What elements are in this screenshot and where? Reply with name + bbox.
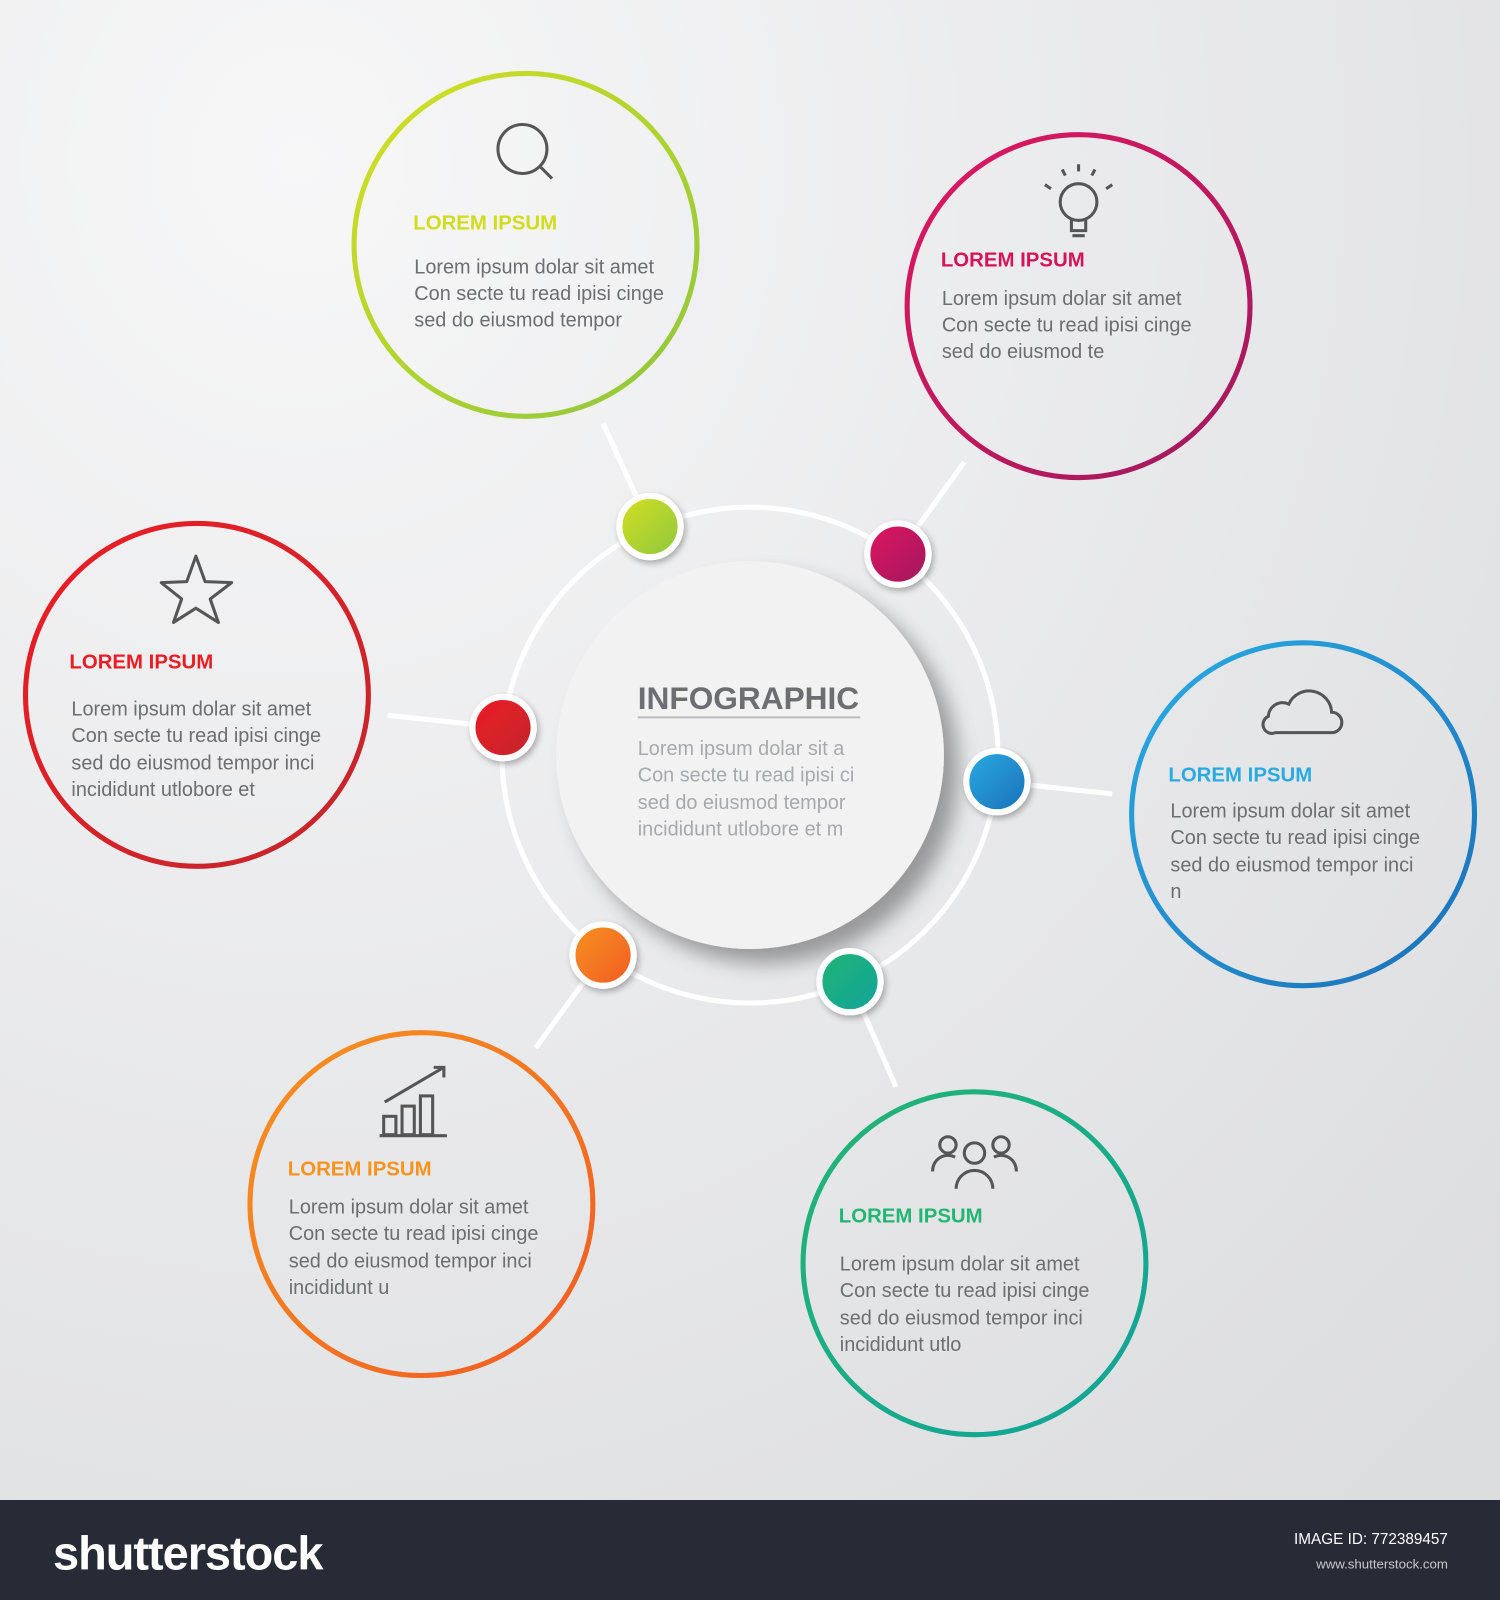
central ring bbox=[502, 507, 998, 1003]
center title: INFOGRAPHIC bbox=[638, 680, 859, 716]
panel: orange: Con secte tu read ipisi cinge bbox=[289, 1223, 538, 1245]
panel: red bbox=[26, 523, 368, 866]
panel: yellow-green: LOREM IPSUM bbox=[413, 213, 557, 235]
icon: chart bbox=[380, 1067, 447, 1136]
panel: yellow-green bbox=[354, 73, 697, 416]
panel: orange: incididunt u bbox=[289, 1277, 389, 1299]
center body: sed do eiusmod tempor bbox=[638, 792, 846, 814]
panel: blue: sed do eiusmod tempor inci bbox=[1170, 854, 1413, 876]
center body: incididunt utlobore et m bbox=[638, 819, 843, 841]
panel: yellow-green: Con secte tu read ipisi cinge bbox=[414, 283, 664, 305]
panel: red: sed do eiusmod tempor inci bbox=[71, 752, 314, 774]
panel: teal: sed do eiusmod tempor inci bbox=[840, 1307, 1083, 1329]
center body: Lorem ipsum dolar sit a bbox=[638, 738, 845, 760]
panel: teal: incididunt utlo bbox=[840, 1334, 961, 1356]
footer logo: shutterstock bbox=[53, 1527, 324, 1579]
panel: teal bbox=[803, 1092, 1146, 1435]
panel: blue: LOREM IPSUM bbox=[1168, 765, 1312, 787]
panel: red: LOREM IPSUM bbox=[69, 651, 213, 673]
footer bar bbox=[0, 1500, 1500, 1600]
panel: magenta: LOREM IPSUM bbox=[941, 249, 1085, 271]
dots bbox=[472, 496, 1028, 1012]
panel: orange bbox=[250, 1033, 593, 1376]
panel: teal: LOREM IPSUM bbox=[839, 1205, 983, 1227]
center body: Con secte tu read ipisi ci bbox=[638, 765, 854, 787]
panel: yellow-green: Lorem ipsum dolar sit amet bbox=[414, 256, 654, 278]
footer id: IMAGE ID: 772389457 bbox=[1294, 1531, 1448, 1548]
panel: magenta: Lorem ipsum dolar sit amet bbox=[942, 288, 1182, 310]
panel: orange: Lorem ipsum dolar sit amet bbox=[289, 1196, 529, 1218]
panel: blue: n bbox=[1170, 881, 1181, 903]
panel: teal: Con secte tu read ipisi cinge bbox=[840, 1280, 1089, 1302]
center body bbox=[638, 738, 854, 841]
panel: yellow-green: sed do eiusmod tempor bbox=[414, 310, 622, 332]
icon: bulb bbox=[1045, 164, 1112, 236]
icon: people bbox=[933, 1137, 1016, 1189]
panel: magenta: sed do eiusmod te bbox=[942, 341, 1104, 363]
panel: orange: LOREM IPSUM bbox=[288, 1159, 432, 1181]
panel: orange: sed do eiusmod tempor inci bbox=[289, 1250, 532, 1272]
panel: blue bbox=[1132, 643, 1474, 986]
icon: cloud bbox=[1263, 691, 1342, 733]
panel: teal: Lorem ipsum dolar sit amet bbox=[840, 1253, 1080, 1275]
panel: magenta: Con secte tu read ipisi cinge bbox=[942, 315, 1192, 337]
panel: blue: Con secte tu read ipisi cinge bbox=[1170, 827, 1420, 849]
panel: red: Con secte tu read ipisi cinge bbox=[71, 725, 321, 747]
connector lines bbox=[388, 423, 1112, 1087]
panel: red: incididunt utlobore et bbox=[71, 779, 255, 801]
icon: star bbox=[161, 556, 232, 622]
center disc bbox=[556, 561, 944, 949]
panel: blue: Lorem ipsum dolar sit amet bbox=[1170, 800, 1411, 822]
panel: red: Lorem ipsum dolar sit amet bbox=[71, 698, 312, 720]
panel: magenta bbox=[907, 135, 1250, 478]
footer bar: www.shutterstock.com bbox=[1315, 1556, 1448, 1571]
icon: magnifier bbox=[498, 124, 552, 179]
